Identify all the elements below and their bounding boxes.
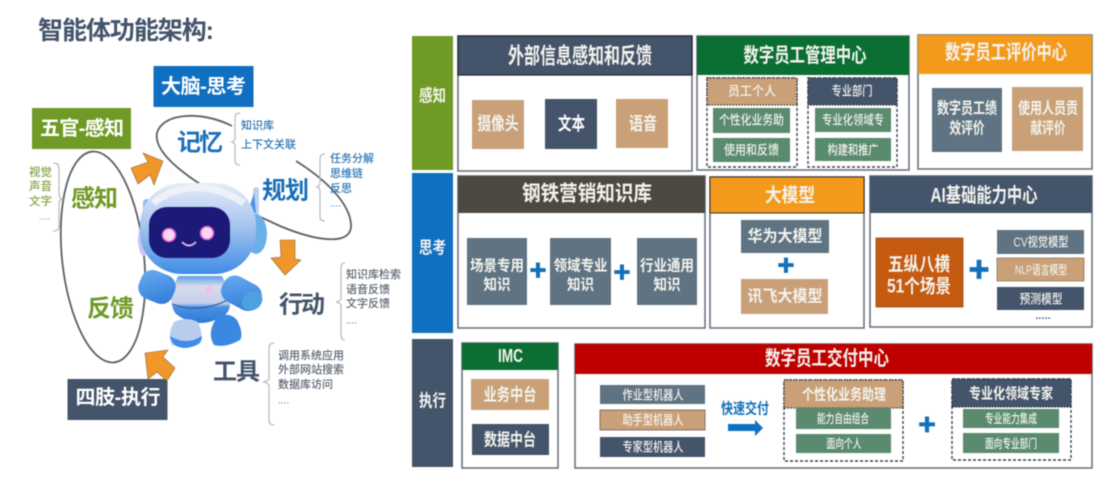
box: 场景专用知识 bbox=[467, 238, 527, 305]
panel: 数字员工评价中心 bbox=[918, 35, 1092, 169]
icon: robot mascot bbox=[135, 183, 267, 348]
tool items: 调用系统应用 bbox=[278, 348, 344, 362]
group: 专业化领域专家: 面向专业部门 bbox=[985, 436, 1037, 451]
action items: 语音反馈 bbox=[346, 282, 390, 296]
tool items: .... bbox=[278, 396, 289, 406]
planning items: 任务分解 bbox=[330, 151, 374, 165]
side label: 思考 bbox=[412, 173, 453, 333]
panel header bbox=[710, 177, 864, 213]
panel: 数字员工交付中心 bbox=[575, 344, 1092, 468]
box: 文本 bbox=[545, 99, 597, 149]
memory items bbox=[232, 113, 296, 165]
box: 业务中台: 业务中台 bbox=[484, 384, 536, 404]
label: 工具: 工具 bbox=[213, 358, 260, 386]
group: 员工个人: 使用和反馈 bbox=[724, 142, 779, 158]
panel header: 钢铁营销知识库 bbox=[522, 182, 652, 206]
tool items bbox=[263, 343, 344, 425]
label: 记忆: 记忆 bbox=[177, 130, 223, 156]
box: 摄像头: 摄像头 bbox=[478, 113, 518, 134]
panel: AI基础能力中心 bbox=[870, 176, 1092, 327]
panel header: 数字员工交付中心 bbox=[765, 346, 889, 370]
heading: 大脑-思考 bbox=[154, 66, 254, 107]
plus: + bbox=[614, 257, 630, 289]
box: NLP语言模型: NLP语言模型 bbox=[1015, 262, 1067, 277]
label: 反馈: 反馈 bbox=[87, 296, 134, 322]
box: 数字员工绩效评价: 数字员工绩 bbox=[937, 98, 997, 118]
box: 讯飞大模型 bbox=[741, 279, 828, 314]
box: 使用人员贡献评价: 使用人员贡 bbox=[1018, 100, 1078, 118]
panel header: 大模型 bbox=[765, 184, 815, 206]
box: 作业型机器人: 作业型机器人 bbox=[622, 388, 684, 402]
planning items: 思维链 bbox=[330, 166, 363, 180]
panel title: 数字员工评价中心 bbox=[945, 40, 1067, 64]
box: 使用人员贡献评价 bbox=[1012, 87, 1083, 151]
box: 语音 bbox=[616, 99, 668, 148]
panel header bbox=[458, 176, 705, 213]
side label: 执行: 执行 bbox=[419, 392, 446, 410]
box: 华为大模型 bbox=[741, 220, 829, 253]
group: 专业化领域专家: 专业化领域专家 bbox=[969, 384, 1053, 402]
box: 场景专用知识: 知识 bbox=[484, 276, 510, 294]
planning items bbox=[317, 151, 374, 221]
memory items: 知识库 bbox=[241, 118, 274, 132]
label: 快速交付: 快速交付 bbox=[721, 400, 769, 418]
plus: + bbox=[968, 248, 990, 290]
arrow: brain to action bbox=[271, 240, 301, 275]
box: 五纵八横 51个场景: 五纵八横 bbox=[888, 254, 950, 276]
panel header bbox=[870, 176, 1092, 213]
tool items: 数据库访问 bbox=[278, 377, 333, 391]
box: 语音: 语音 bbox=[629, 113, 657, 134]
group: 员工个人: 员工个人 bbox=[728, 84, 776, 98]
panel header bbox=[458, 36, 692, 75]
arrow: limbs to robot bbox=[145, 350, 175, 381]
planning items: 反思 bbox=[330, 182, 352, 195]
group: 专业化领域专家: 专业能力集成 bbox=[985, 411, 1037, 426]
panel: 数字员工管理中心 bbox=[697, 36, 909, 170]
box: 讯飞大模型: 讯飞大模型 bbox=[748, 288, 822, 306]
panel header bbox=[697, 36, 909, 75]
group: 专业部门: 专业化领域专 bbox=[822, 112, 884, 128]
group: 个性化业务助理: 个性化业务助理 bbox=[802, 386, 886, 404]
panel: 大模型 bbox=[710, 177, 864, 328]
box: 文本: 文本 bbox=[558, 113, 585, 134]
perception inputs list bbox=[29, 163, 62, 231]
panel: 外部信息感知和反馈 bbox=[458, 36, 692, 171]
box: 五纵八横 51个场景: 51个场景 bbox=[887, 276, 951, 298]
plus: + bbox=[530, 255, 546, 287]
perception inputs list: 文字 bbox=[29, 194, 52, 208]
box: 助手型机器人 bbox=[600, 410, 705, 430]
panel header: IMC bbox=[498, 346, 523, 366]
group: 专业化领域专家 bbox=[952, 379, 1071, 460]
action items: 知识库检索 bbox=[346, 267, 401, 281]
label: 规划: 规划 bbox=[262, 178, 309, 204]
group: 专业部门 bbox=[808, 78, 897, 167]
side label: 思考: 思考 bbox=[419, 238, 446, 258]
box: NLP语言模型 bbox=[997, 258, 1084, 281]
group: 员工个人: 个性化业务助 bbox=[719, 112, 784, 128]
group: 专业部门: 构建和推广 bbox=[828, 142, 878, 158]
box: 数字员工绩效评价: 效评价 bbox=[950, 118, 984, 138]
box: 数据中台: 数据中台 bbox=[484, 430, 536, 450]
box: 专家型机器人 bbox=[600, 437, 705, 457]
ellipsis dots: ..... bbox=[1035, 310, 1051, 322]
planning items: .... bbox=[330, 198, 341, 210]
panel header bbox=[575, 344, 1092, 374]
memory items: 上下文关联 bbox=[241, 137, 296, 151]
perception inputs list: 声音 bbox=[29, 179, 52, 193]
ellipse: 感知 and 反馈 loop bbox=[51, 147, 155, 367]
heading: 四肢-执行 bbox=[68, 379, 168, 420]
side label: 感知: 感知 bbox=[419, 86, 446, 106]
box: 专家型机器人: 专家型机器人 bbox=[622, 440, 684, 454]
box: 预测模型 bbox=[997, 287, 1084, 310]
box: 助手型机器人: 助手型机器人 bbox=[622, 412, 684, 428]
action items: 文字反馈 bbox=[346, 296, 390, 310]
group: 专业部门: 专业部门 bbox=[832, 84, 872, 98]
label: 感知: 感知 bbox=[71, 184, 118, 212]
heading: 五官-感知: 五官-感知 bbox=[40, 117, 124, 140]
plus: + bbox=[918, 408, 936, 442]
arrow: perception to brain bbox=[131, 153, 163, 185]
box: 领域专业知识: 领域专业 bbox=[554, 256, 608, 274]
label: 行动: 行动 bbox=[279, 292, 325, 318]
box: 五纵八横 51个场景 bbox=[876, 238, 963, 307]
box: 摄像头 bbox=[472, 100, 524, 149]
group: 个性化业务助理: 能力自由组合 bbox=[817, 411, 869, 426]
box: CV视觉模型: CV视觉模型 bbox=[1014, 234, 1068, 250]
perception inputs list: 视觉 bbox=[29, 165, 52, 179]
box: 领域专业知识: 知识 bbox=[567, 276, 594, 294]
box: 作业型机器人 bbox=[600, 385, 705, 404]
heading: 四肢-执行: 四肢-执行 bbox=[76, 386, 160, 409]
panel header: AI基础能力中心 bbox=[930, 184, 1038, 207]
title: 智能体功能架构: bbox=[38, 17, 214, 45]
heading: 五官-感知 bbox=[32, 108, 131, 149]
box: 华为大模型: 华为大模型 bbox=[748, 226, 822, 246]
panel header: 外部信息感知和反馈 bbox=[508, 44, 652, 68]
box: 行业通用知识 bbox=[637, 238, 697, 305]
box: 领域专业知识 bbox=[550, 238, 611, 305]
arrow: fast delivery bbox=[728, 420, 763, 436]
box: 预测模型: 预测模型 bbox=[1020, 292, 1062, 306]
action items: .... bbox=[346, 316, 357, 326]
group: 个性化业务助理 bbox=[784, 380, 903, 461]
box: 场景专用知识: 场景专用 bbox=[470, 256, 524, 274]
box: 数字员工绩效评价 bbox=[932, 88, 1002, 152]
ellipse: 记忆 and 规划 loop bbox=[157, 116, 351, 239]
side label: 感知 bbox=[412, 36, 453, 170]
box: CV视觉模型 bbox=[997, 230, 1084, 254]
panel title: 数字员工管理中心 bbox=[744, 43, 866, 67]
panel header bbox=[918, 35, 1092, 74]
box: 使用人员贡献评价: 献评价 bbox=[1030, 118, 1066, 138]
panel: 钢铁营销知识库 bbox=[458, 176, 705, 328]
plus: + bbox=[778, 250, 794, 282]
perception inputs list: .... bbox=[39, 212, 50, 222]
group: 员工个人 bbox=[707, 78, 797, 167]
panel: IMC bbox=[462, 343, 558, 468]
box: 行业通用知识: 行业通用 bbox=[640, 258, 694, 274]
tool items: 外部网站搜索 bbox=[278, 362, 344, 376]
action items bbox=[336, 263, 401, 340]
side label: 执行 bbox=[412, 339, 453, 467]
box: 行业通用知识: 知识 bbox=[654, 276, 680, 294]
group: 个性化业务助理: 面向个人 bbox=[826, 436, 862, 451]
heading: 大脑-思考: 大脑-思考 bbox=[161, 75, 246, 98]
